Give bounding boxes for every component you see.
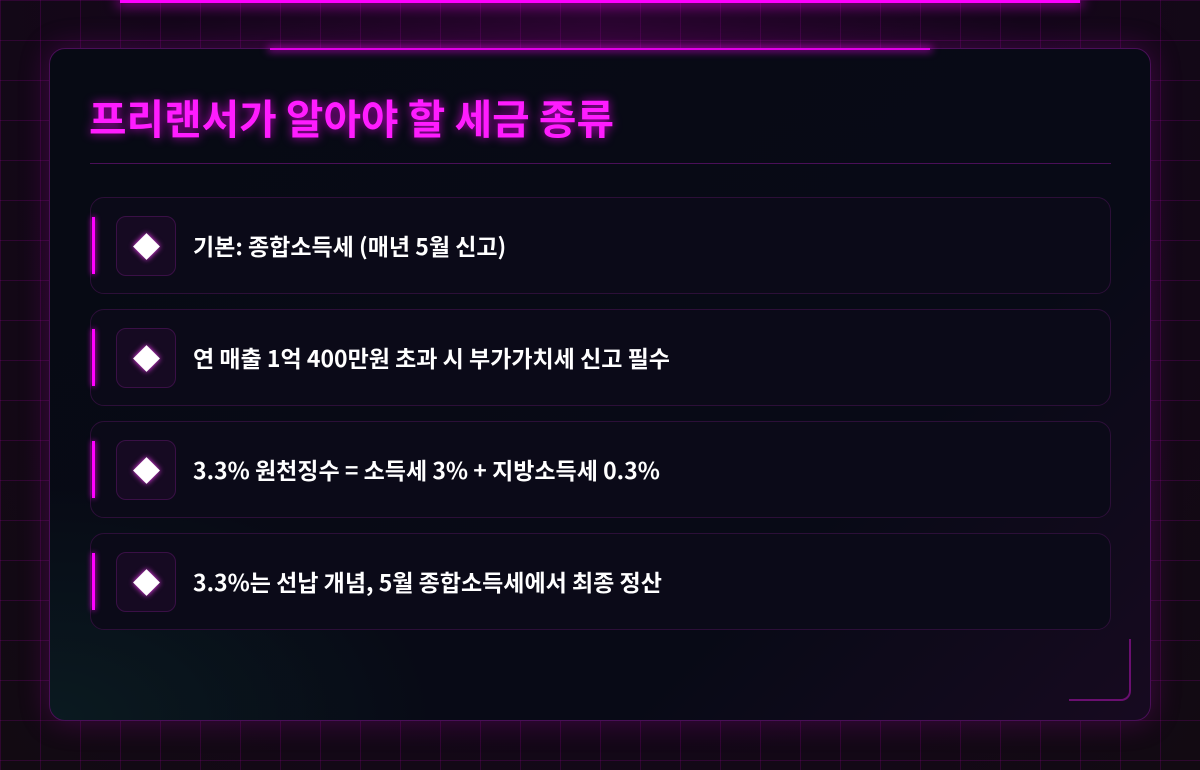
corner bracket (1069, 639, 1131, 701)
icon: diamond (116, 440, 176, 500)
icon: diamond (116, 328, 176, 388)
item 2 (90, 309, 1111, 406)
item 3 (90, 421, 1111, 518)
icon: diamond (116, 552, 176, 612)
title: 프리랜서가 알아야 할 세금 종류 (89, 87, 614, 146)
item 1 (90, 197, 1111, 294)
icon: diamond (116, 216, 176, 276)
text 4: 3.3%는 선납 개념, 5월 종합소득세에서 최종 정산 (193, 564, 662, 598)
text 2: 연 매출 1억 400만원 초과 시 부가가치세 신고 필수 (193, 340, 670, 374)
text 3: 3.3% 원천징수 = 소득세 3% + 지방소득세 0.3% (193, 452, 660, 486)
text 1: 기본: 종합소득세 (매년 5월 신고) (193, 228, 506, 262)
item 4 (90, 533, 1111, 630)
